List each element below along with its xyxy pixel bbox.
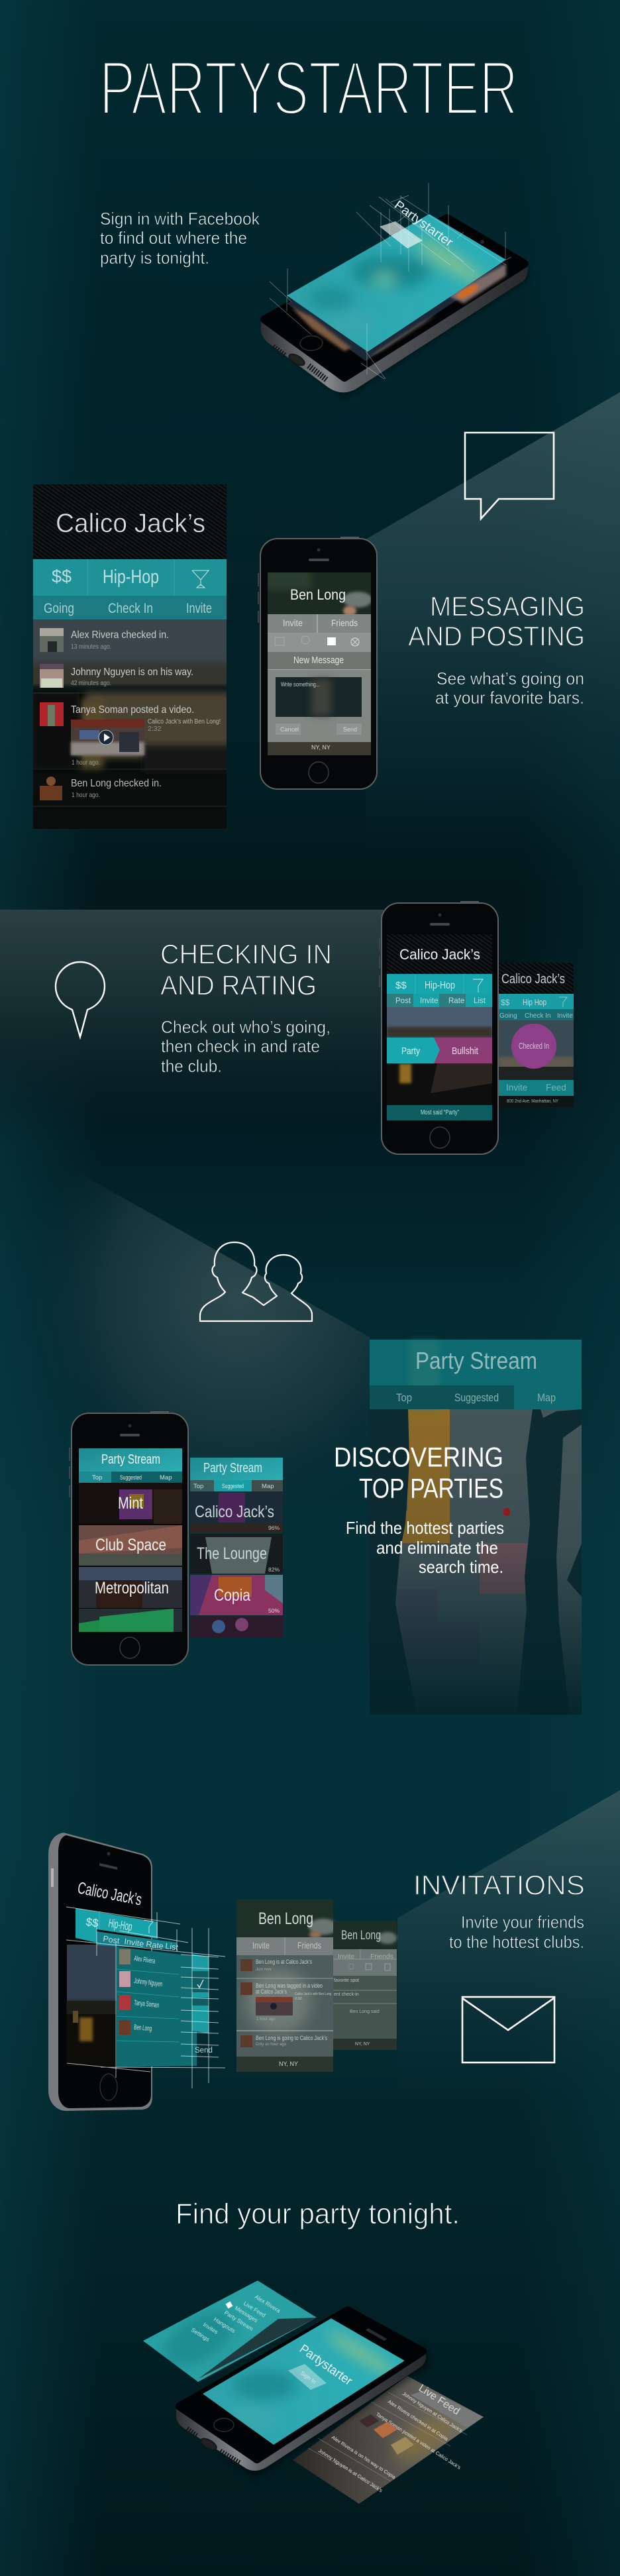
phone: party stream: Suggested bbox=[120, 1474, 142, 1481]
light wedge: discovering bbox=[0, 1128, 370, 1723]
venue photo bbox=[387, 1007, 492, 1093]
panel: checked in screen: Check In bbox=[525, 1012, 550, 1020]
text block: messaging: See what’s going on bbox=[437, 669, 584, 688]
isometric composition: closing bbox=[143, 2281, 484, 2504]
heading: checking in and rating: AND RATING bbox=[160, 970, 317, 1000]
stream header bbox=[79, 1448, 182, 1483]
friend list layer: Tanya Soman bbox=[134, 1999, 160, 2010]
map header: Party Stream bbox=[415, 1347, 537, 1374]
panel: Ben Long profile behind: Ben Long said bbox=[350, 2010, 380, 2014]
phone: party stream: Mint bbox=[118, 1494, 143, 1513]
check column layer: Send bbox=[195, 2047, 213, 2055]
right edge glow bbox=[521, 0, 620, 2576]
sign in label: Sign In bbox=[299, 2369, 317, 2385]
teal login layer bbox=[287, 214, 506, 352]
panel: Ben Long profile behind: NY, NY bbox=[355, 2042, 370, 2047]
toolbar layer: Hip-Hop bbox=[107, 1916, 133, 1933]
profile header photo bbox=[236, 1900, 333, 1937]
back card: menu: Live Feed bbox=[242, 2300, 267, 2319]
invite and friends tabs: Invite bbox=[283, 617, 303, 628]
feed item: Tanya Soman: 1 hour ago. bbox=[72, 759, 100, 767]
feed item: Tanya Soman bbox=[40, 702, 221, 767]
venue list bbox=[79, 1483, 182, 1632]
venue photo layer bbox=[67, 1945, 117, 2066]
friend list layer: Ben Long bbox=[134, 2023, 152, 2033]
back card: live feed bbox=[293, 2376, 484, 2504]
panel: party stream map bbox=[370, 1340, 582, 1716]
panel: Ben Long profile behind: Ben Long bbox=[341, 1929, 381, 1943]
panel: checked in screen: $$ bbox=[501, 998, 510, 1007]
checked in circle: Checked In bbox=[519, 1042, 549, 1051]
video thumbnail bbox=[71, 720, 144, 755]
sign in button bbox=[288, 2364, 327, 2390]
back card: live feed: Tanya Soman posted a video at Calico Jack’s bbox=[375, 2411, 462, 2471]
panel: checked in screen: Invite bbox=[557, 1012, 573, 1020]
back card: menu: Messages bbox=[234, 2304, 259, 2324]
panel: checked in screen: Feed bbox=[546, 1083, 566, 1093]
heading: messaging and posting bbox=[408, 591, 585, 652]
phone: new message bbox=[258, 537, 377, 789]
teal toolbar: Hip-Hop bbox=[425, 980, 455, 991]
icon: martini glass bbox=[192, 570, 209, 588]
speaker slot bbox=[366, 2328, 387, 2341]
teal toolbar: Hip-Hop bbox=[103, 566, 159, 588]
phone side bbox=[261, 260, 528, 392]
panel: suggested stream: Top bbox=[193, 1483, 203, 1490]
text block: discovering: search time. bbox=[419, 1557, 503, 1577]
back card: live feed: Alex Rivera is on his way to Copia bbox=[331, 2434, 397, 2481]
icon row bbox=[268, 633, 371, 652]
profile header photo bbox=[268, 572, 371, 614]
phone side bbox=[176, 2349, 426, 2471]
location footer: NY, NY bbox=[311, 744, 331, 751]
feed rows: Calico Jack’s with Ben Long bbox=[295, 1992, 331, 1996]
heading: checking in and rating bbox=[160, 938, 332, 1000]
venue name: Calico Jack’s bbox=[76, 1878, 143, 1909]
feed rows: Ben Long is at Calico Jack’s bbox=[256, 1959, 312, 1965]
back card: live feed: Johnny Nguyen is at Calico Jack’s bbox=[317, 2447, 384, 2494]
blurred backdrop bbox=[245, 1968, 311, 2034]
toolbar layer: $$ bbox=[85, 1915, 99, 1930]
feed item: Alex Rivera: 13 minutes ago. bbox=[71, 643, 111, 651]
location footer bbox=[236, 2057, 333, 2072]
teal toolbar: Post bbox=[395, 997, 411, 1005]
blurred venue photo bbox=[33, 619, 227, 774]
heading: invitations: INVITATIONS bbox=[413, 1870, 585, 1900]
heading: discovering top parties: DISCOVERING bbox=[334, 1442, 503, 1472]
speaker and port bbox=[187, 2429, 240, 2463]
panel: suggested stream: Copia bbox=[214, 1586, 250, 1605]
feed item: Alex Rivera: Alex Rivera checked in. bbox=[71, 629, 169, 641]
teal toolbar: Invite bbox=[186, 601, 212, 616]
light wedge: invitations bbox=[397, 1790, 620, 2100]
light wedge: checking in bbox=[0, 910, 384, 1140]
new message bar bbox=[268, 652, 371, 670]
closing tagline: Find your party tonight. bbox=[176, 2198, 460, 2230]
back card: menu bbox=[143, 2281, 317, 2382]
location footer bbox=[268, 742, 371, 755]
feed item: Johnny Nguyen: Johnny Nguyen is on his way. bbox=[71, 667, 193, 678]
app name: Partystarter bbox=[297, 2342, 355, 2388]
home button bbox=[309, 762, 329, 783]
sub tab layer: Invite bbox=[124, 1937, 144, 1949]
panel: checked in screen bbox=[499, 963, 574, 1107]
phone: rating: Calico Jack’s bbox=[399, 946, 480, 963]
icon: location pin bbox=[56, 962, 105, 1037]
feed item: Johnny Nguyen: 42 minutes ago. bbox=[71, 679, 111, 687]
new message bar: New Message bbox=[293, 655, 344, 666]
teal toolbar: $$ bbox=[52, 566, 72, 586]
text block: sign in bbox=[100, 209, 260, 268]
rating options bbox=[387, 1038, 492, 1063]
feed item: Tanya Soman: Tanya Soman posted a video. bbox=[71, 704, 194, 716]
panel: Ben Long profile feed: Ben Long bbox=[258, 1909, 313, 1928]
message form: Send bbox=[343, 726, 357, 733]
back card: menu: Settings bbox=[190, 2326, 211, 2343]
feed rows: Ben Long was tagged in a video bbox=[256, 1982, 323, 1989]
back card: menu: Alex Rivera bbox=[254, 2293, 282, 2314]
perspective phone: invitations bbox=[48, 1833, 225, 2111]
map fade bbox=[370, 1409, 582, 1715]
screen header bbox=[387, 934, 492, 974]
checked in circle bbox=[511, 1024, 556, 1069]
feed rows: Only an hour ago bbox=[256, 2043, 287, 2047]
panel: Ben Long profile behind: ent check-in bbox=[334, 1992, 359, 1997]
feed rows: Ben Long is going to Calico Jack’s bbox=[256, 2035, 327, 2041]
sign in button bbox=[380, 221, 423, 248]
feed rows: 1 hour ago bbox=[256, 2017, 276, 2021]
panel: suggested stream: 96% bbox=[268, 1525, 280, 1531]
tabs and icons: Friends bbox=[370, 1953, 393, 1960]
phone face bbox=[58, 1835, 151, 2108]
phone shadow bbox=[265, 262, 530, 398]
feed rows: Just now bbox=[256, 1968, 272, 1972]
camera and speaker bbox=[317, 549, 321, 551]
invite and friends tabs bbox=[268, 614, 371, 633]
text block: invitations bbox=[449, 1912, 584, 1952]
teal toolbar: Going bbox=[44, 601, 74, 616]
message form: Write something... bbox=[281, 681, 320, 688]
message form: Cancel bbox=[280, 726, 299, 733]
panel background bbox=[33, 484, 227, 829]
phone: rating bbox=[380, 901, 498, 1154]
text block: discovering: and eliminate the bbox=[376, 1538, 498, 1558]
panel: Ben Long profile feed bbox=[236, 1900, 338, 2072]
text block: checking in bbox=[161, 1017, 331, 1076]
home button bbox=[100, 2074, 117, 2100]
phone: party stream: Metropolitan bbox=[95, 1579, 169, 1597]
teal toolbar bbox=[33, 559, 227, 619]
teal toolbar: Check In bbox=[108, 601, 153, 616]
panel: suggested stream: 50% bbox=[268, 1607, 280, 1614]
icon: speech bubble bbox=[465, 433, 554, 519]
heading: discovering top parties: TOP PARTIES bbox=[359, 1472, 503, 1504]
teal toolbar: $$ bbox=[395, 980, 407, 991]
phone shadow bbox=[185, 2345, 431, 2478]
back card: live feed: Live Feed bbox=[417, 2383, 462, 2418]
camera bbox=[480, 240, 484, 244]
teal toolbar: Rate bbox=[448, 997, 464, 1005]
isometric phone: sign in bbox=[261, 183, 530, 398]
map shapes bbox=[370, 1409, 582, 1716]
sub tab layer: Rate bbox=[146, 1939, 164, 1951]
feed rows: at Calico Jack’s bbox=[256, 1988, 287, 1995]
phone: rating: Most said “Party” bbox=[421, 1109, 459, 1116]
feed item: Alex Rivera bbox=[40, 628, 169, 652]
text block: checking in: then check in and rate bbox=[161, 1036, 320, 1056]
feed item: Ben Long: 1 hour ago. bbox=[72, 791, 100, 799]
phone body bbox=[72, 1413, 188, 1665]
icon: envelope bbox=[462, 1997, 554, 2063]
panel: Calico Jack's feed bbox=[26, 484, 233, 829]
panel: Ben Long profile behind bbox=[333, 1921, 397, 2050]
text block: sign in: to find out where the bbox=[100, 228, 247, 248]
text block: invitations: to the hottest clubs. bbox=[449, 1932, 584, 1952]
app name: Partystarter bbox=[391, 198, 456, 250]
phone: party stream: Top bbox=[92, 1474, 102, 1481]
text block: sign in: party is tonight. bbox=[100, 248, 209, 268]
speaker and port bbox=[273, 347, 327, 380]
panel: suggested stream: Suggested bbox=[222, 1483, 244, 1489]
invite and friends tabs: Invite bbox=[252, 1940, 270, 1951]
phone face bbox=[180, 2310, 423, 2459]
venue photo bbox=[499, 1020, 574, 1081]
panel: checked in screen: Going bbox=[499, 1012, 517, 1020]
toolbar layer bbox=[76, 1908, 158, 1943]
location footer: NY, NY bbox=[279, 2061, 298, 2067]
text block: checking in: the club. bbox=[161, 1056, 222, 1076]
blueprint guide lines bbox=[66, 1907, 225, 2088]
phone: party stream: Map bbox=[160, 1474, 172, 1481]
feed item: Tanya Soman: Calico Jack’s with Ben Long! bbox=[148, 718, 221, 725]
friend list layer: Alex Rivera bbox=[134, 1955, 156, 1965]
text block: messaging: at your favorite bars. bbox=[435, 688, 584, 708]
friend list layer: Johnny Nguyen bbox=[134, 1977, 163, 1988]
invite and friends tabs: Friends bbox=[331, 617, 358, 628]
panel: suggested stream bbox=[190, 1458, 283, 1638]
light wedge: messaging bbox=[366, 392, 620, 855]
back card: menu: Invites bbox=[202, 2321, 219, 2335]
panel: suggested stream: Map bbox=[262, 1483, 274, 1490]
text block: invitations: Invite your friends bbox=[461, 1912, 584, 1932]
city screen under layer bbox=[287, 222, 506, 361]
back card: live feed: Alex Rivera checked in at Copia bbox=[387, 2398, 450, 2442]
panel: checked in screen: 800 2nd Ave. Manhattan, NY bbox=[507, 1098, 558, 1104]
sub tab layer bbox=[97, 1931, 179, 1953]
phone face bbox=[264, 218, 525, 378]
blueprint guide lines bbox=[270, 183, 511, 379]
rivers bbox=[370, 1409, 412, 1691]
text block: discovering bbox=[346, 1518, 504, 1577]
sub tab layer: Post bbox=[103, 1934, 121, 1946]
map header: Suggested bbox=[454, 1391, 499, 1404]
city lights bbox=[291, 264, 506, 358]
map pin bbox=[503, 1508, 510, 1516]
phone: party stream bbox=[70, 1411, 188, 1665]
screen: Ben Long bbox=[290, 586, 346, 603]
heading: messaging and posting: AND POSTING bbox=[408, 620, 585, 652]
map header: Top bbox=[396, 1391, 412, 1404]
home button bbox=[300, 335, 323, 351]
panel: suggested stream: Party Stream bbox=[203, 1461, 262, 1476]
camera and speaker bbox=[107, 1852, 110, 1855]
panel: suggested stream: The Lounge bbox=[197, 1544, 267, 1563]
invite and friends tabs: Friends bbox=[297, 1940, 321, 1951]
text block: discovering: Find the hottest parties bbox=[346, 1518, 504, 1538]
map header: Map bbox=[537, 1391, 556, 1404]
check column layer bbox=[192, 1954, 213, 2055]
text block: messaging bbox=[435, 669, 584, 708]
feed rows: 2:32 bbox=[295, 1997, 302, 2001]
feed rows bbox=[236, 1959, 333, 2047]
icon: two people bbox=[200, 1242, 312, 1321]
back card: menu: Party Stream bbox=[223, 2309, 254, 2332]
panel: suggested stream: 82% bbox=[268, 1566, 280, 1573]
venue name: Calico Jack’s bbox=[56, 509, 205, 538]
invite and friends tabs bbox=[236, 1937, 333, 1955]
phone body bbox=[382, 903, 498, 1154]
patterned header bbox=[33, 484, 227, 559]
phone shell bbox=[48, 1833, 152, 2111]
panel: checked in screen: Hip Hop bbox=[523, 997, 546, 1007]
photo thumbnails bbox=[359, 2414, 414, 2455]
map land bbox=[370, 1409, 582, 1715]
panel: suggested stream: Calico Jack’s bbox=[195, 1503, 274, 1521]
tabs and icons: Invite bbox=[338, 1953, 354, 1960]
heading: messaging and posting: MESSAGING bbox=[430, 591, 585, 621]
venue list bbox=[190, 1491, 283, 1638]
map header bbox=[370, 1340, 582, 1409]
feed item: Tanya Soman: 2:32 bbox=[148, 725, 162, 733]
rating options: Bullshit bbox=[452, 1046, 479, 1057]
teal login screen bbox=[203, 2318, 405, 2445]
heading: discovering top parties bbox=[334, 1442, 503, 1504]
friend list layer bbox=[117, 1947, 197, 2067]
feed item: Ben Long: Ben Long checked in. bbox=[71, 778, 162, 789]
feed item: Ben Long bbox=[40, 777, 162, 800]
teal toolbar bbox=[387, 974, 492, 1007]
home button bbox=[214, 2418, 234, 2432]
phone: party stream: Club Space bbox=[95, 1536, 166, 1554]
text block: sign in: Sign in with Facebook bbox=[100, 209, 260, 229]
panel: checked in screen: Invite bbox=[506, 1083, 527, 1093]
panel: Ben Long profile behind: favorite spot bbox=[334, 1978, 359, 1983]
panel: checked in screen: Calico Jack’s bbox=[501, 972, 565, 987]
left edge glow bbox=[0, 0, 99, 2576]
screen bbox=[265, 570, 372, 755]
heading: checking in and rating: CHECKING IN bbox=[160, 938, 332, 970]
feed item: Johnny Nguyen bbox=[40, 664, 193, 688]
back card: menu: Hangouts bbox=[213, 2316, 236, 2334]
teal toolbar: List bbox=[474, 997, 486, 1005]
phone body bbox=[260, 539, 377, 789]
phone: party stream: Party Stream bbox=[101, 1452, 160, 1467]
sub tab layer: List bbox=[165, 1941, 179, 1953]
teal toolbar: Invite bbox=[420, 997, 439, 1005]
text block: checking in: Check out who’s going, bbox=[161, 1017, 331, 1037]
message form bbox=[268, 671, 371, 742]
rating options: Party bbox=[401, 1046, 420, 1057]
back card: live feed: Johnny Nguyen at Calico Jack’s bbox=[401, 2390, 464, 2434]
tabs and icons bbox=[333, 1949, 397, 1976]
